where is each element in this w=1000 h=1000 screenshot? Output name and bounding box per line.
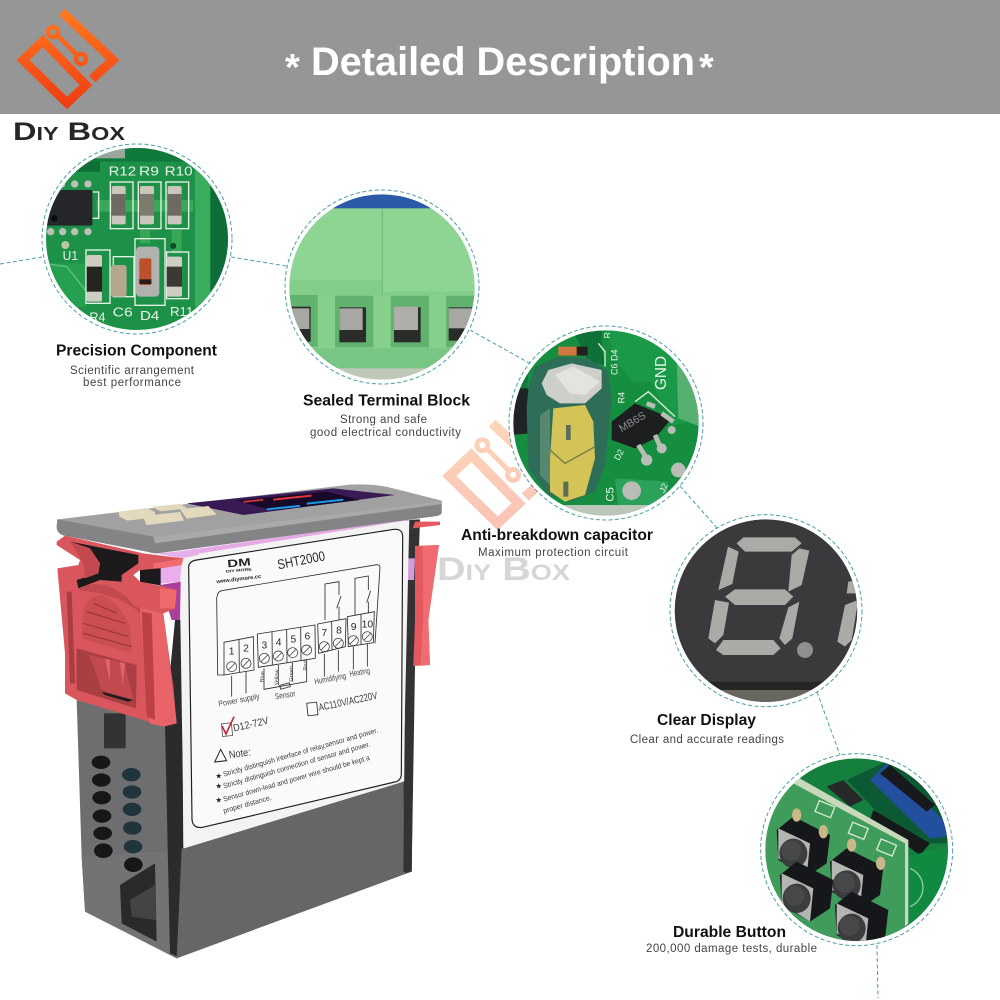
wiring labels: Red <box>303 660 309 671</box>
device side housing <box>77 700 182 958</box>
note text: Note: <box>228 746 252 761</box>
wiring labels: Blue <box>260 671 266 682</box>
caption: clear display <box>630 712 784 746</box>
photo circle: capacitor: D2 <box>612 447 626 462</box>
header band <box>0 0 1000 114</box>
terminal numbers: 3 <box>261 640 267 651</box>
watermark text: Diy Box <box>437 551 570 587</box>
terminal numbers: 2 <box>243 643 249 654</box>
caption: precision component: Scientific arrangement <box>70 365 195 377</box>
brand mark on label: www.diymore.cc <box>215 574 262 585</box>
caption: precision component <box>56 342 218 389</box>
photo circle: capacitor: C5 <box>604 487 616 502</box>
brand mark on label: DIY MORE <box>226 567 253 574</box>
photo circle: capacitor: C6 D4 <box>610 350 620 375</box>
label panel <box>179 520 409 848</box>
caption: capacitor: Maximum protection circuit <box>478 547 629 559</box>
wiring labels: Sensor <box>274 688 296 701</box>
terminal numbers: 7 <box>321 628 327 639</box>
wiring labels <box>217 660 371 709</box>
photo circle: precision component: R4 <box>89 311 106 325</box>
red clip left <box>57 536 200 727</box>
top bezel <box>57 484 442 553</box>
photo circle: capacitor: R4 <box>616 392 626 403</box>
wiring labels: Power supply <box>217 691 261 709</box>
terminal numbers: 8 <box>336 625 342 636</box>
caption: terminal block: good electrical conductivity <box>310 427 461 439</box>
photo circle: durable button <box>760 754 957 952</box>
note text: Strictly distinguish interface of relay,sensor and power. <box>222 726 379 779</box>
vent slots <box>92 713 143 872</box>
caption: precision component: best performance <box>83 377 181 389</box>
photo circle: precision component: R10 <box>165 164 193 178</box>
dashed connector lines <box>0 257 878 998</box>
title: Detailed Description <box>311 40 695 84</box>
terminal numbers: 6 <box>304 632 310 643</box>
photo circle: capacitor: R <box>602 332 612 338</box>
photo circle: terminal block <box>280 190 487 385</box>
caption: terminal block: Sealed Terminal Block <box>303 392 470 410</box>
brand mark on label <box>215 556 262 585</box>
voltage options <box>221 691 379 736</box>
wiring labels: Yellow <box>274 669 280 686</box>
note text: ★ <box>215 771 222 780</box>
brand logo: Diy Box <box>13 118 125 146</box>
wiring diagram <box>217 565 380 697</box>
brand logo <box>13 12 125 146</box>
note text: ★ <box>215 796 222 805</box>
wiring labels: Heating <box>349 665 371 679</box>
caption: clear display: Clear and accurate readings <box>630 734 784 746</box>
terminal numbers: 1 <box>229 646 235 657</box>
terminal numbers: 10 <box>362 619 373 630</box>
caption: terminal block <box>303 392 470 439</box>
photo circle: precision component: R12 <box>109 164 136 178</box>
photo circle: precision component: R9 <box>139 164 159 178</box>
title: * <box>699 47 714 89</box>
wiring labels: Green <box>289 666 295 682</box>
lavender strip under bezel <box>160 519 407 557</box>
terminal numbers: 9 <box>351 622 357 633</box>
keypad buttons <box>119 504 217 525</box>
photo circle: capacitor: GND <box>653 356 670 390</box>
red clip right <box>413 522 440 666</box>
voltage options: AC110V/AC220V <box>318 691 379 714</box>
photo circle: precision component: R11 <box>170 305 193 319</box>
device front lower panel <box>177 780 413 958</box>
watermark logo <box>449 423 548 523</box>
right housing strip <box>403 519 420 872</box>
note text: proper distance. <box>222 793 273 815</box>
note text: ★ <box>215 781 222 790</box>
terminal numbers: 5 <box>290 634 296 645</box>
terminal numbers <box>229 619 373 657</box>
product: temperature controller <box>57 484 442 958</box>
caption: clear display: Clear Display <box>657 712 756 729</box>
caption: durable button: Durable Button <box>673 924 786 941</box>
note text <box>215 726 379 815</box>
photo circle: capacitor: MB6S <box>617 410 648 435</box>
note text: Strictly distinguish connection of sensor and power. <box>222 740 371 790</box>
photo circle: capacitor <box>505 325 705 525</box>
caption: capacitor <box>461 527 653 559</box>
photo circle: capacitor: J2 <box>657 481 670 494</box>
caption: precision component: Precision Component <box>56 342 218 360</box>
voltage options: D12-72V <box>232 716 270 735</box>
caption: durable button: 200,000 damage tests, durable <box>646 943 817 955</box>
photo circle: precision component: D4 <box>140 309 159 323</box>
caption: capacitor: Anti-breakdown capacitor <box>461 527 653 544</box>
model name: SHT2000 <box>276 548 327 572</box>
title: * <box>285 47 300 89</box>
photo circle: precision component: U1 <box>63 249 78 263</box>
caption: durable button <box>646 924 817 955</box>
caption: terminal block: Strong and safe <box>340 414 427 426</box>
photo circle: precision component: C6 <box>113 306 133 320</box>
note text: Sensor down-lead and power wire should be kept a <box>222 753 371 804</box>
wiring labels: Humidifying <box>313 670 347 686</box>
photo circle: clear display <box>670 515 867 708</box>
terminal numbers: 4 <box>276 637 282 648</box>
brand mark on label: DM <box>227 556 251 570</box>
photo circle: precision component <box>42 143 233 334</box>
